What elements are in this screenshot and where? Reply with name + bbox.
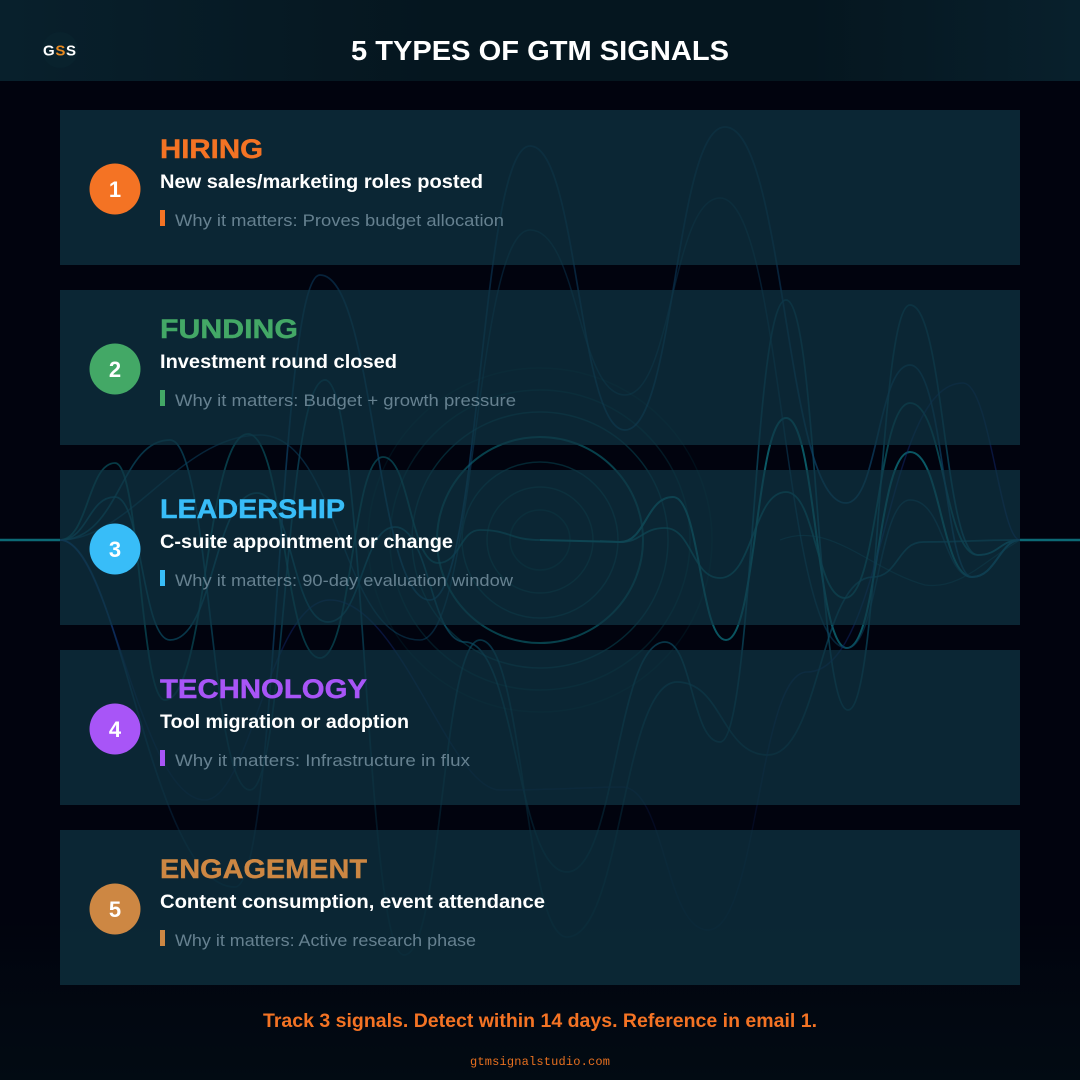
number badge 5: 5 <box>109 897 121 922</box>
logo: GSS <box>43 42 76 60</box>
accent bar <box>160 750 165 766</box>
panel: funding <box>60 290 1020 445</box>
heading: funding: FUNDING <box>160 314 298 344</box>
background: concentric circles and signal waves <box>0 126 1080 830</box>
heading: engagement: ENGAGEMENT <box>160 854 368 884</box>
footer url: gtmsignalstudio.com <box>470 1055 610 1069</box>
header bar <box>0 0 1080 81</box>
number badge 3 <box>90 524 140 574</box>
why it matters: Why it matters: Active research phase <box>175 931 476 950</box>
number badge 2: 2 <box>109 357 121 382</box>
accent bar <box>160 570 165 586</box>
why it matters: Why it matters: 90-day evaluation window <box>175 571 514 590</box>
description: New sales/marketing roles posted <box>160 172 483 193</box>
footer callout: Track 3 signals. Detect within 14 days. Reference in email 1. <box>263 1011 817 1032</box>
why it matters: Why it matters: Proves budget allocation <box>175 211 504 230</box>
panel: hiring <box>60 110 1020 265</box>
number badge 2 <box>90 344 140 394</box>
heading: leadership: LEADERSHIP <box>160 494 345 524</box>
why it matters: Why it matters: Infrastructure in flux <box>175 751 471 770</box>
logo <box>42 32 78 68</box>
why it matters: Why it matters: Budget + growth pressure <box>175 391 516 410</box>
description: Content consumption, event attendance <box>160 892 545 913</box>
number badge 1: 1 <box>109 177 121 202</box>
number badge 1 <box>90 164 140 214</box>
heading: technology: TECHNOLOGY <box>160 674 367 704</box>
description: Investment round closed <box>160 352 397 373</box>
description: C-suite appointment or change <box>160 532 453 553</box>
title: 5 TYPES OF GTM SIGNALS <box>351 35 729 66</box>
description: Tool migration or adoption <box>160 712 409 733</box>
number badge 4: 4 <box>109 717 122 742</box>
accent bar <box>160 210 165 226</box>
number badge 3: 3 <box>109 537 121 562</box>
panel: technology <box>60 650 1020 805</box>
panel: engagement <box>60 830 1020 985</box>
heading: hiring: HIRING <box>160 134 263 164</box>
accent bar <box>160 930 165 946</box>
accent bar <box>160 390 165 406</box>
number badge 5 <box>90 884 140 934</box>
panel: leadership <box>60 470 1020 625</box>
number badge 4 <box>90 704 140 754</box>
